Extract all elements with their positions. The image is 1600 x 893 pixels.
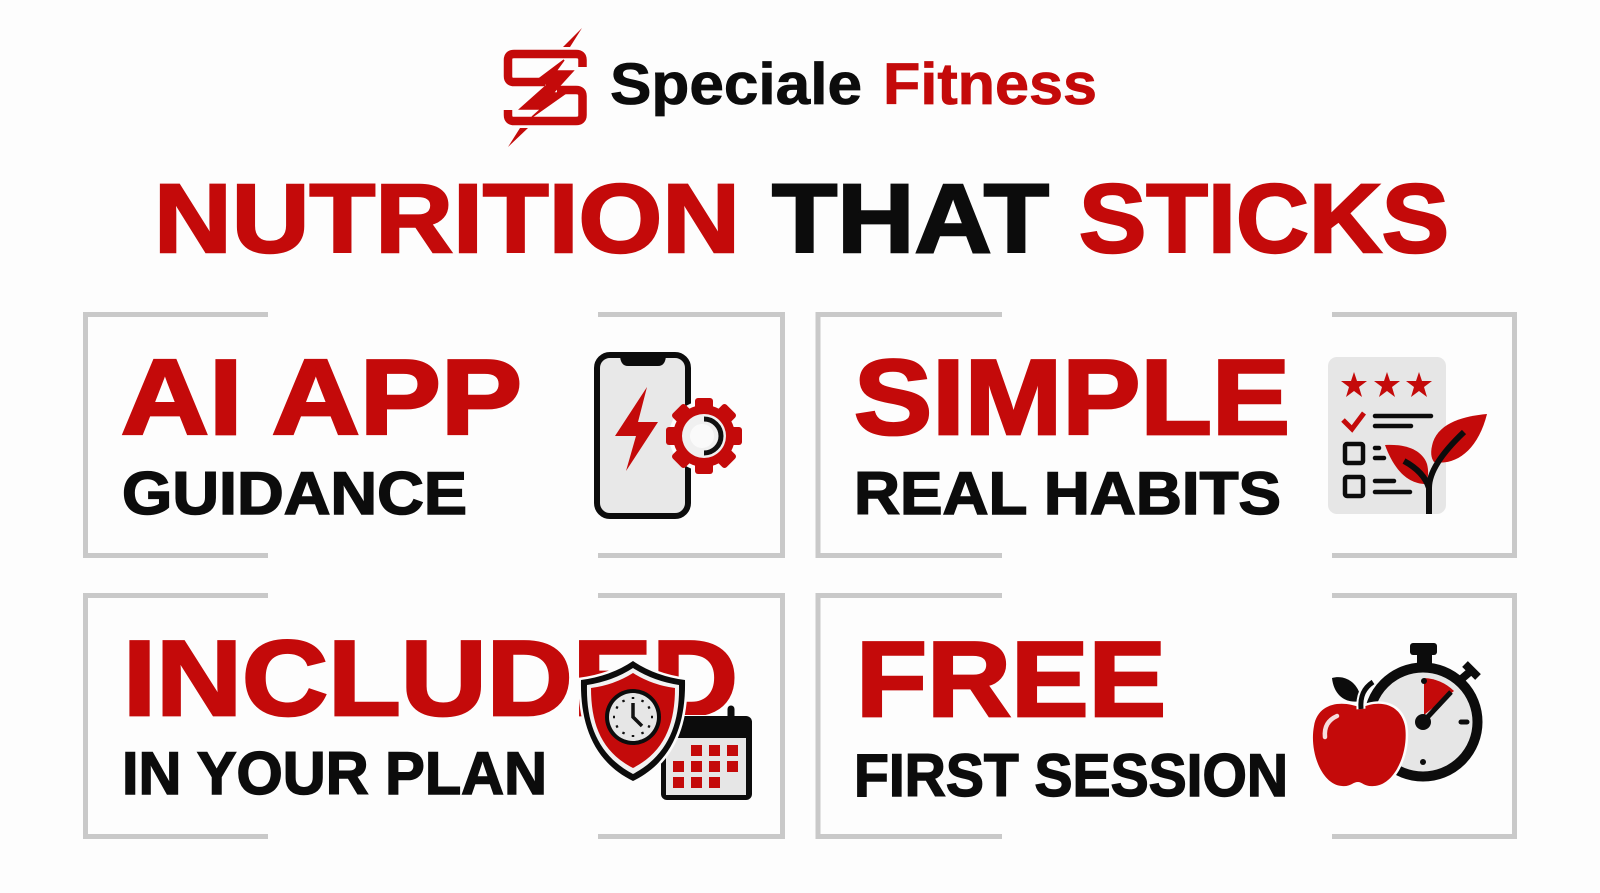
title: NUTRITION xyxy=(154,164,740,273)
subheading: GUIDANCE: GUIDANCE xyxy=(122,460,467,527)
subheading: FIRST SESSION: FIRST SESSION xyxy=(854,742,1288,809)
heading: INCLUDED: INCLUDED xyxy=(123,618,738,738)
icon: shield with clock xyxy=(581,661,685,781)
heading: FREE: FREE xyxy=(856,619,1166,739)
heading: SIMPLE: SIMPLE xyxy=(854,337,1290,457)
logo wordmark xyxy=(610,52,1097,117)
icon: apple xyxy=(1313,677,1406,786)
panel: Simple Real Habits xyxy=(818,314,1514,556)
title xyxy=(154,164,1449,273)
panel: AI App Guidance xyxy=(86,314,782,556)
subheading: IN YOUR PLAN: IN YOUR PLAN xyxy=(122,740,547,807)
panel: Included In Your Plan xyxy=(86,596,782,836)
subheading: REAL HABITS: REAL HABITS xyxy=(854,460,1281,527)
icon: checklist with plant xyxy=(1328,357,1487,514)
heading: AI APP: AI APP xyxy=(121,337,522,457)
title: STICKS xyxy=(1079,164,1449,273)
icon: calendar xyxy=(661,709,752,800)
icon: phone with bolt and gear xyxy=(597,354,742,516)
icon: stopwatch xyxy=(1368,643,1478,776)
logo: Speciale Fitness xyxy=(508,28,1097,147)
logo wordmark: Fitness xyxy=(883,52,1097,117)
icon: S lightning logo xyxy=(508,28,582,147)
logo wordmark: Speciale xyxy=(610,52,862,117)
title: THAT xyxy=(772,164,1049,273)
panel: Free First Session xyxy=(818,596,1514,836)
